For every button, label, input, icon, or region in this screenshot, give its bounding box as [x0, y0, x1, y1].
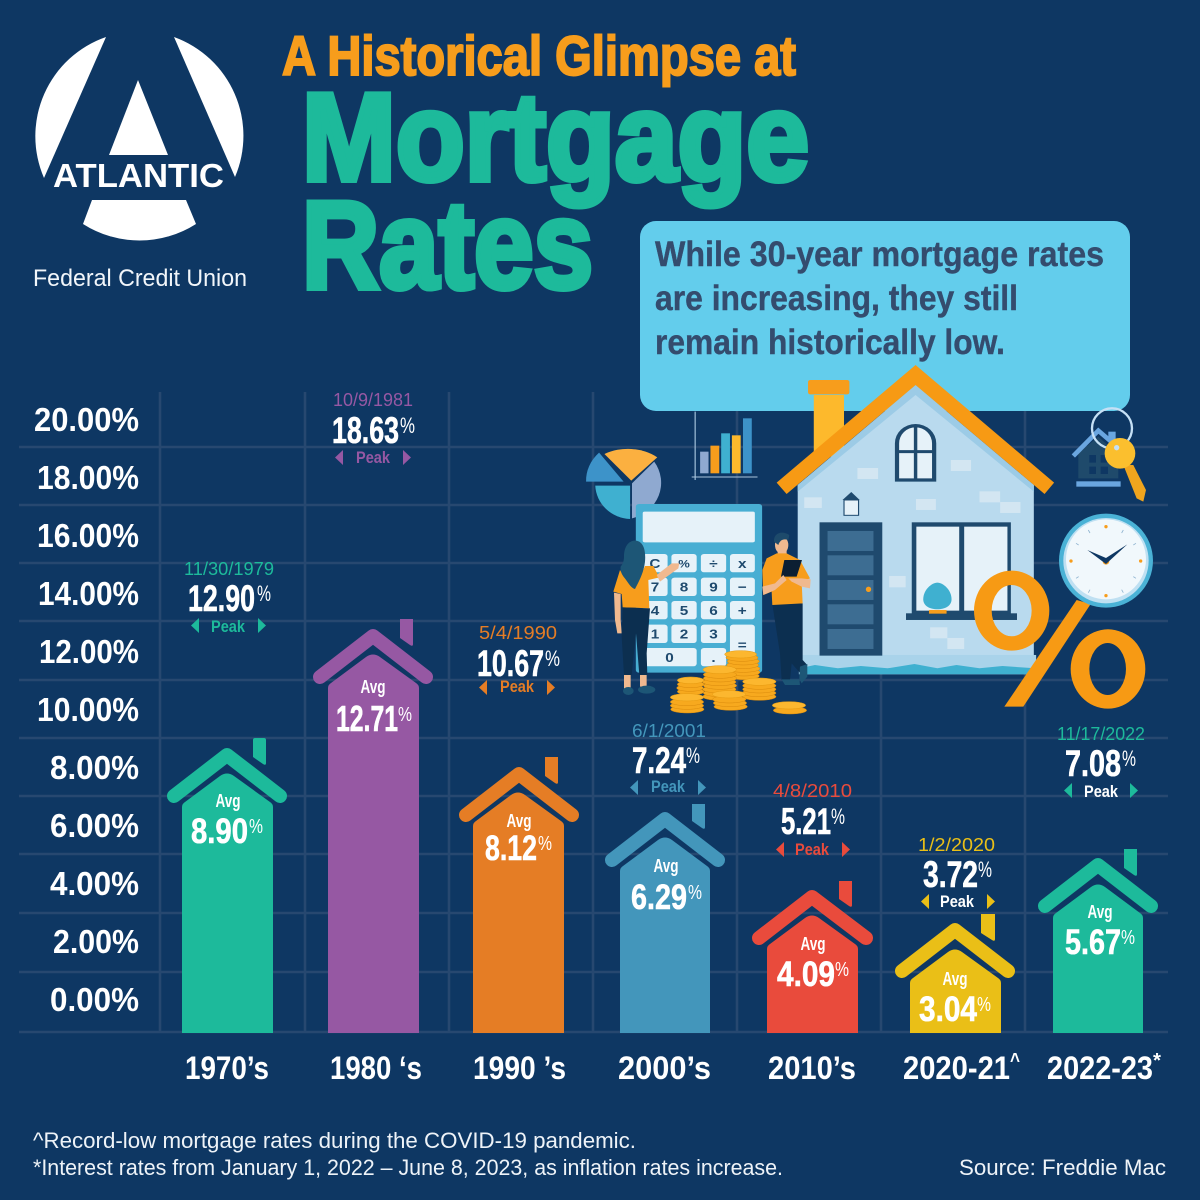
peak: 1980's [332, 390, 415, 467]
peak: 1970's: 12.90 [188, 578, 255, 619]
footnotes: ^Record-low mortgage rates during the COVID-19 pandemic. [33, 1128, 636, 1153]
house bar: 1970's: Avg [216, 791, 240, 811]
x axis labels: 2010’s [768, 1050, 856, 1086]
house bar: 2020-21: % [977, 994, 991, 1016]
house bar: 2010's: Avg [800, 934, 826, 954]
y axis labels: 6.00% [50, 807, 139, 844]
peak: 2010's: 4/8/2010 [773, 781, 852, 801]
icon: calculator: 5 [680, 604, 688, 619]
house bar: 2022-23: Avg [1088, 902, 1112, 922]
icon: calculator: + [738, 604, 747, 619]
icon: house keys [1073, 408, 1146, 502]
icon: calculator: 3 [709, 627, 718, 642]
house bar: 1970's: % [249, 816, 263, 838]
house bar: 2000's [612, 804, 718, 1033]
peak: 2022-23: % [1122, 746, 1136, 771]
title [282, 24, 809, 315]
callout [640, 221, 1130, 411]
icon: calculator: 0 [665, 651, 674, 666]
peak: 1980's: % [400, 413, 415, 438]
house [777, 365, 1054, 674]
y axis labels: 10.00% [37, 691, 139, 728]
y axis labels [34, 401, 139, 1018]
icon: clock [1059, 514, 1153, 608]
house bar: 2000's: % [688, 882, 702, 904]
house bar: 2010's: % [835, 959, 849, 981]
person: woman [613, 541, 679, 695]
icon: calculator: − [738, 580, 747, 595]
house bar: 2010's [759, 881, 866, 1033]
peak: 2020-21 [918, 835, 995, 911]
icon: calculator: 7 [651, 580, 659, 595]
title: Mortgage [302, 69, 809, 207]
x axis labels: ^ [1010, 1050, 1020, 1072]
peak: 1970's: 11/30/1979 [184, 559, 274, 579]
icon: calculator: 2 [680, 627, 688, 642]
y axis labels: 0.00% [50, 981, 139, 1018]
house bar: 2000's: 6.29 [631, 878, 687, 917]
peak: 2022-23 [1057, 724, 1145, 801]
peak: 2010's: Peak [795, 840, 829, 859]
house bar: 2020-21 [902, 914, 1008, 1033]
x axis labels: 1970’s [185, 1050, 269, 1086]
callout: remain historically low. [655, 323, 1005, 362]
icon: calculator: 1 [651, 627, 659, 642]
house bar: 2020-21: 3.04 [919, 990, 977, 1029]
house bar: 1980's: 12.71 [336, 698, 398, 739]
y axis labels: 18.00% [37, 459, 139, 496]
x axis labels: 2022-23 [1047, 1050, 1153, 1086]
house bar: 2022-23 [1045, 849, 1151, 1033]
peak: 2010's: % [831, 804, 845, 829]
x axis labels: 1980 ‘s [330, 1050, 422, 1086]
house bar: 1970's [174, 738, 280, 1033]
footnotes: *Interest rates from January 1, 2022 – June 8, 2023, as inflation rates increase. [33, 1155, 783, 1180]
source: Source: Freddie Mac [959, 1155, 1166, 1180]
callout: are increasing, they still [655, 279, 1018, 318]
icon: calculator: x [738, 557, 746, 572]
icon: gold coins [670, 651, 807, 714]
peak: 1980's: 10/9/1981 [333, 390, 413, 410]
house bar: 1990's: 8.12 [485, 829, 537, 868]
peak: 2022-23: 7.08 [1065, 743, 1121, 784]
icon: calculator: = [738, 638, 747, 653]
house bar: 2010's: 4.09 [777, 955, 835, 994]
icon: calculator: ÷ [709, 557, 718, 572]
title: Rates [302, 177, 593, 315]
y axis labels: 4.00% [50, 865, 139, 902]
peak: 2000's: 6/1/2001 [632, 721, 706, 741]
peak: 1990's: % [545, 646, 560, 671]
house bar: 2022-23: % [1121, 927, 1135, 949]
peak: 2020-21: 3.72 [923, 854, 978, 895]
icon: percent sign [974, 571, 1145, 709]
person: man [762, 533, 811, 685]
peak: 1990's [477, 623, 560, 696]
house bar: 2022-23: 5.67 [1065, 923, 1121, 962]
icon: calculator [636, 504, 762, 673]
house bar: 1980's: Avg [360, 677, 386, 697]
peak: 1970's: Peak [211, 617, 245, 636]
x axis labels: 2020-21 [903, 1050, 1010, 1086]
peak: 1980's: 18.63 [332, 410, 399, 451]
peak: 2010's: 5.21 [781, 801, 831, 842]
x axis labels [185, 1050, 1161, 1086]
x axis labels: 1990 ’s [473, 1050, 566, 1086]
icon: calculator: 9 [709, 580, 718, 595]
peak: 2022-23: 11/17/2022 [1057, 724, 1145, 744]
house bar: 1980's [320, 619, 426, 1033]
icon: calculator: 6 [709, 604, 718, 619]
peak: 2020-21: 1/2/2020 [918, 835, 995, 855]
peak: 1990's: 5/4/1990 [479, 623, 557, 643]
icon: calculator: C [649, 557, 660, 572]
peak: 2000's [630, 721, 706, 796]
peak: 2022-23: Peak [1084, 782, 1118, 801]
peak: 2010's [773, 781, 852, 859]
logo: Atlantic Federal Credit Union [33, 37, 247, 292]
peak: 2020-21: % [978, 857, 992, 882]
icon: calculator: 8 [680, 580, 688, 595]
logo: Atlantic Federal Credit Union: Federal Credit Union [33, 265, 247, 292]
peak: 1970's: % [257, 581, 271, 606]
peak: 1990's: Peak [500, 677, 534, 696]
x axis labels: * [1153, 1050, 1161, 1072]
y axis labels: 14.00% [38, 575, 139, 612]
house bar: 2020-21: Avg [942, 969, 968, 989]
house bar: 1990's: Avg [506, 811, 532, 831]
peak: 2000's: Peak [651, 777, 685, 796]
title: A Historical Glimpse at [282, 24, 796, 87]
y axis labels: 16.00% [37, 517, 139, 554]
icon: calculator: % [678, 557, 690, 570]
peak: 1980's: Peak [356, 448, 390, 467]
peak: 1990's: 10.67 [477, 643, 544, 684]
house bar: 1980's: % [398, 704, 412, 726]
house bar: 1990's [466, 757, 572, 1033]
y axis labels: 20.00% [34, 401, 139, 438]
y axis labels: 2.00% [53, 923, 139, 960]
icon: calculator: 4 [651, 604, 659, 619]
callout: While 30-year mortgage rates [655, 235, 1104, 274]
x axis labels: 2000’s [618, 1050, 711, 1086]
logo: Atlantic Federal Credit Union: ATLANTIC [53, 157, 224, 194]
peak: 2020-21: Peak [940, 892, 974, 911]
peak: 1970's [184, 559, 274, 636]
house bar: 1990's: % [538, 833, 552, 855]
y axis labels: 12.00% [39, 633, 139, 670]
icon: bar chart [692, 412, 758, 480]
peak: 2000's: 7.24 [632, 740, 686, 781]
icon: pie chart [586, 449, 661, 519]
y axis labels: 8.00% [50, 749, 139, 786]
house bar: 2000's: Avg [654, 856, 678, 876]
house bar: 1970's: 8.90 [191, 812, 248, 851]
illustration: home, calculator and finance icons [586, 365, 1153, 714]
footnotes [33, 1128, 783, 1180]
icon: calculator: . [711, 651, 716, 666]
peak: 2000's: % [686, 743, 700, 768]
